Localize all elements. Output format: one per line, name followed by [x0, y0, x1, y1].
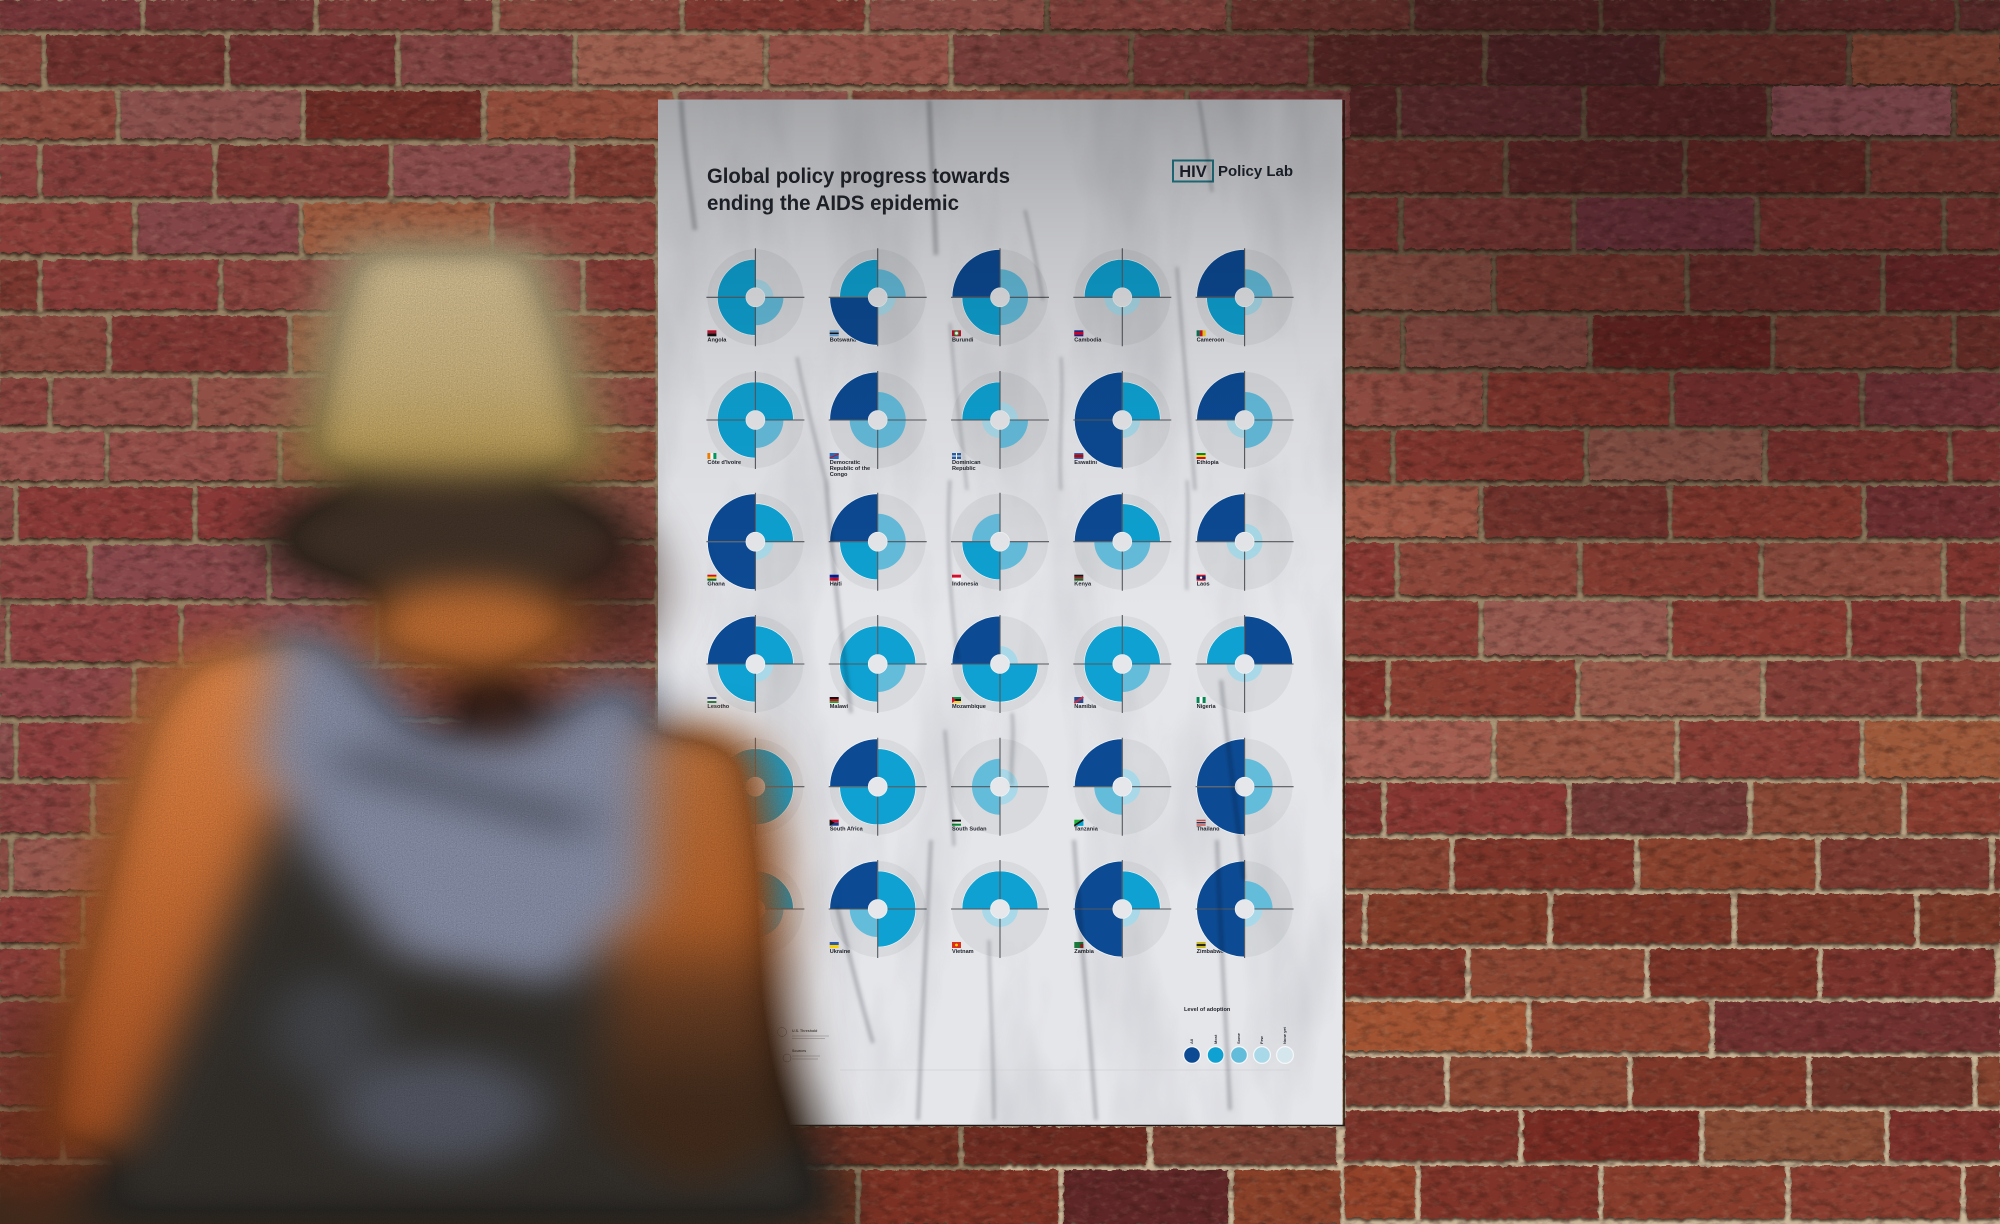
- logo: HIV Policy Lab: Policy Lab: [1218, 164, 1293, 180]
- chart: Angola: [706, 248, 804, 346]
- chart: Indonesia: [951, 493, 1049, 591]
- logo: HIV Policy Lab: HIV: [1179, 163, 1207, 181]
- chart: Nigeria: [1196, 615, 1294, 713]
- chart: Haiti: [829, 493, 927, 591]
- chart: Ethiopia: Ethiopia: [1197, 460, 1220, 466]
- chart: Dominican Republic: [951, 371, 1049, 472]
- chart: Angola: Angola: [707, 337, 727, 343]
- chart: Malawi: Malawi: [830, 704, 848, 710]
- chart: Ghana: Ghana: [707, 582, 726, 588]
- legend: level of adoption: All: [1189, 1039, 1194, 1044]
- chart: Tanzania: Tanzania: [1074, 827, 1099, 833]
- chart: Indonesia: Indonesia: [952, 582, 979, 588]
- legend: level of adoption: Some: [1236, 1032, 1241, 1044]
- chart: Eswatini: Eswatini: [1074, 460, 1097, 466]
- chart: Zimbabwe: [1196, 860, 1294, 958]
- chart: Laos: Laos: [1197, 582, 1210, 588]
- title: [707, 165, 1010, 215]
- chart: Cambodia: [1073, 248, 1171, 346]
- legend: level of adoption: [1184, 1007, 1293, 1063]
- legend: level of adoption: Most: [1213, 1034, 1218, 1044]
- chart: Botswana: Botswana: [830, 337, 857, 343]
- poster bottom edge shadow: [790, 100, 1344, 1126]
- chart: Cambodia: Cambodia: [1074, 337, 1102, 343]
- chart: Mozambique: Mozambique: [952, 704, 986, 710]
- title: Global policy progress towards: [707, 165, 1010, 188]
- chart: Democratic Republic of the Congo: [829, 371, 927, 478]
- chart: Uganda: Uganda: [707, 949, 729, 955]
- logo: HIV Policy Lab: [1173, 160, 1293, 182]
- chart: Cameroon: [1196, 248, 1294, 346]
- panel: wrinkled poster: [658, 100, 1344, 1126]
- legend: level of adoption: None yet: [1282, 1026, 1287, 1044]
- chart: South Sudan: [951, 738, 1049, 836]
- chart: Vietnam: Vietnam: [952, 949, 974, 955]
- chart: Ghana: [706, 493, 804, 591]
- chart: Laos: [1196, 493, 1294, 591]
- title: ending the AIDS epidemic: [707, 192, 959, 215]
- chart: Nigeria: Nigeria: [1197, 704, 1216, 710]
- dark floor of blurred figure: [0, 1172, 848, 1224]
- chart: Burundi: Burundi: [952, 337, 974, 343]
- blurred passer-by in foreground: [0, 240, 840, 1224]
- chart: Kenya: Kenya: [1074, 582, 1092, 588]
- chart: Thailand: [1196, 738, 1294, 836]
- chart: Lesotho: Lesotho: [707, 704, 730, 710]
- chart: Côte d'Ivoire: Côte d'Ivoire: [707, 460, 741, 466]
- chart: Democratic Republic of the Congo: Congo: [830, 472, 848, 478]
- chart: Namibia: Namibia: [1074, 704, 1097, 710]
- chart: Mozambique: [951, 615, 1049, 713]
- footnote text: U.S. Threshold: [792, 1029, 817, 1033]
- chart: Lesotho: [706, 615, 804, 713]
- chart: Burundi: [951, 248, 1049, 346]
- legend: level of adoption: Level of adoption: [1184, 1007, 1231, 1013]
- chart: Democratic Republic of the Congo: Republic of the: [830, 466, 870, 472]
- legend: level of adoption: Few: [1259, 1035, 1264, 1044]
- chart: Botswana: [829, 248, 927, 346]
- footnote text: [778, 1028, 1290, 1070]
- chart: Rwanda: Rwanda: [707, 827, 730, 833]
- chart: Ukraine: Ukraine: [830, 949, 850, 955]
- chart: Malawi: [829, 615, 927, 713]
- chart: Kenya: [1073, 493, 1171, 591]
- chart: Tanzania: [1073, 738, 1171, 836]
- chart: Ethiopia: [1196, 371, 1294, 469]
- chart: Zambia: Zambia: [1074, 949, 1095, 955]
- chart: Côte d'Ivoire: [706, 371, 804, 469]
- poster creases: [681, 100, 1244, 1120]
- chart: Zimbabwe: Zimbabwe: [1197, 949, 1224, 955]
- chart: Eswatini: [1073, 371, 1171, 469]
- chart: South Africa: [829, 738, 927, 836]
- chart: Namibia: [1073, 615, 1171, 713]
- chart: Dominican Republic: Republic: [952, 466, 976, 472]
- chart: Rwanda: [706, 738, 804, 836]
- chart: Thailand: Thailand: [1197, 827, 1220, 833]
- chart: Vietnam: [951, 860, 1049, 958]
- chart: South Africa: South Africa: [830, 827, 864, 833]
- footnote text: Sources: [792, 1049, 806, 1053]
- chart: Ukraine: [829, 860, 927, 958]
- chart: Cameroon: Cameroon: [1197, 337, 1225, 343]
- chart: Democratic Republic of the Congo: Democratic: [830, 460, 860, 466]
- chart: South Sudan: South Sudan: [952, 827, 987, 833]
- chart: Zambia: [1073, 860, 1171, 958]
- chart: Haiti: Haiti: [830, 582, 842, 588]
- chart: Dominican Republic: Dominican: [952, 460, 981, 466]
- chart: Uganda: [706, 860, 804, 958]
